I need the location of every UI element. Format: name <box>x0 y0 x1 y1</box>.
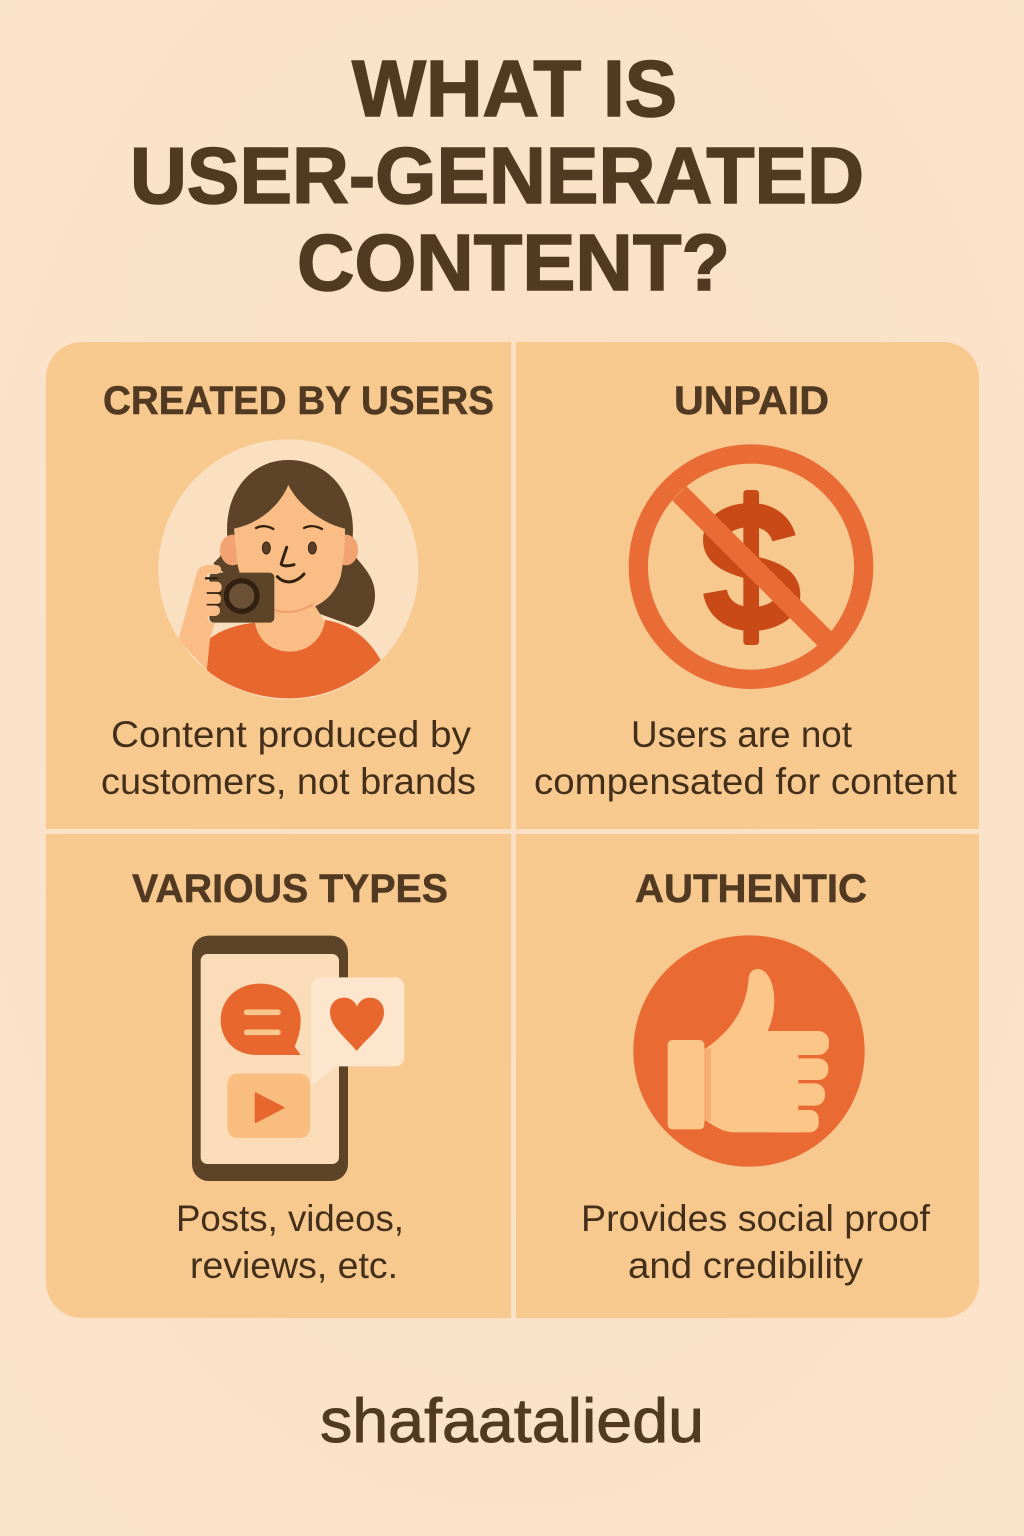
heading: authentic: AUTHENTIC <box>635 867 867 911</box>
text: various types description <box>176 1198 404 1286</box>
title: WHAT IS <box>352 44 677 133</box>
icon: thumbs up <box>633 935 865 1167</box>
text: authentic description: Provides social proof <box>581 1198 931 1239</box>
text: authentic description: and credibility <box>628 1245 864 1286</box>
text: created by users description: customers, not brands <box>101 761 476 802</box>
text: created by users description <box>101 714 476 802</box>
panel: unpaid <box>516 342 979 829</box>
icon: person taking a photo <box>158 439 418 699</box>
icon: phone with social content <box>192 936 404 1181</box>
text: unpaid description <box>534 714 958 802</box>
heading: various types: VARIOUS TYPES <box>132 867 448 911</box>
panel: various types <box>46 834 511 1318</box>
title: USER-GENERATED <box>130 131 864 220</box>
heading: created by users: CREATED BY USERS <box>103 379 494 423</box>
text: various types description: Posts, videos, <box>176 1198 404 1239</box>
title: CONTENT? <box>297 218 730 307</box>
footer: brand name: shafaataliedu <box>320 1387 704 1456</box>
text: unpaid description: compensated for content <box>534 761 958 802</box>
icon: crossed-out dollar <box>638 454 864 679</box>
text: authentic description <box>581 1198 931 1286</box>
panel: created by users <box>46 342 511 829</box>
panel: authentic <box>516 834 979 1318</box>
text: created by users description: Content produced by <box>111 714 472 755</box>
title <box>130 44 864 307</box>
text: various types description: reviews, etc. <box>190 1245 398 1286</box>
heading: unpaid: UNPAID <box>674 379 829 423</box>
text: unpaid description: Users are not <box>631 714 853 755</box>
